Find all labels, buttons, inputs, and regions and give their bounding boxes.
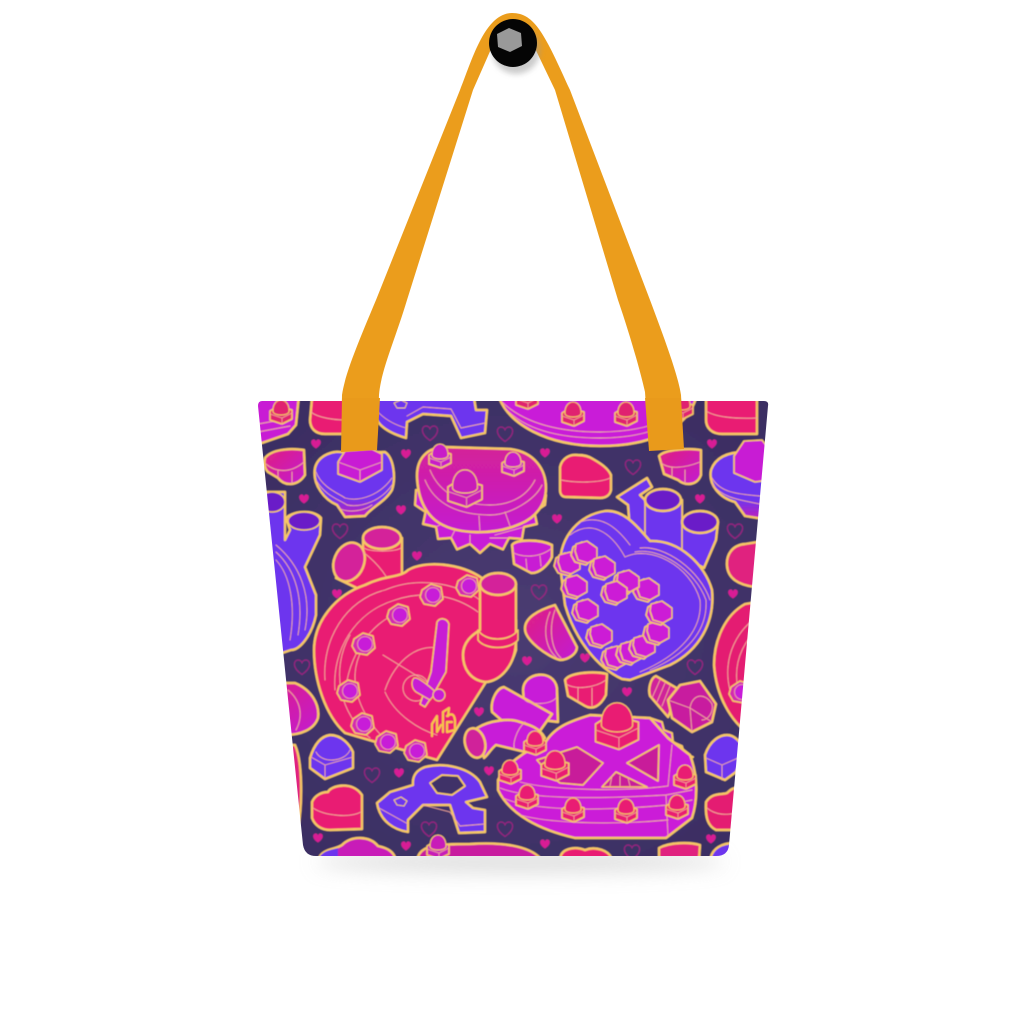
hex nut purple left [310,735,353,779]
stacked purple heart with nut [315,449,394,517]
small outlined hearts [294,426,743,860]
bolts [554,541,672,670]
top-left magenta block fragment [258,401,300,445]
small filled hearts [299,440,738,850]
big pink heart pump [314,527,518,762]
gear heart [415,444,546,553]
strap: front right tab [645,398,684,451]
hex nut purple right [705,735,745,780]
pipes [617,478,718,568]
right pink heart fragments [712,540,756,728]
bottom wrench [377,765,487,833]
pink heart [560,455,611,498]
logo mark [432,708,455,736]
top right heart block [706,398,757,434]
left fragments [286,680,320,824]
strap: loop over hook [341,13,684,452]
strap: front left tab [341,398,380,452]
pipes [461,675,558,760]
stacked purple heart right [711,440,770,520]
top heart block [310,398,346,434]
tote bag body with printed pattern [250,385,780,865]
bottom edge fragments [318,835,735,860]
pink heart lower right [706,788,745,830]
hex bolt [649,676,716,732]
purple heart pump with bolts [554,478,718,680]
lever handle [412,619,449,707]
wall hook [489,19,540,74]
pipes: inlet [328,527,402,592]
small heart left [264,449,305,484]
small pink heart [565,672,607,708]
bag ground shadow [315,852,725,872]
top wrench [376,398,487,438]
purple pump fragment left [266,490,323,655]
heart body [314,564,516,760]
scalloped rim teeth [650,718,693,765]
heart body [498,715,696,838]
small heart near strap [659,449,701,484]
outlet pipe [463,573,518,682]
gear teeth [415,490,546,553]
pink nuts [499,703,696,823]
top magenta disc [498,401,698,448]
nuts [337,575,479,762]
windows [537,745,659,787]
heart body [560,511,712,680]
magenta heart pump [461,675,696,838]
small magenta heart [512,540,552,573]
pink heart lower left [312,786,362,830]
tilted heart [525,605,577,660]
